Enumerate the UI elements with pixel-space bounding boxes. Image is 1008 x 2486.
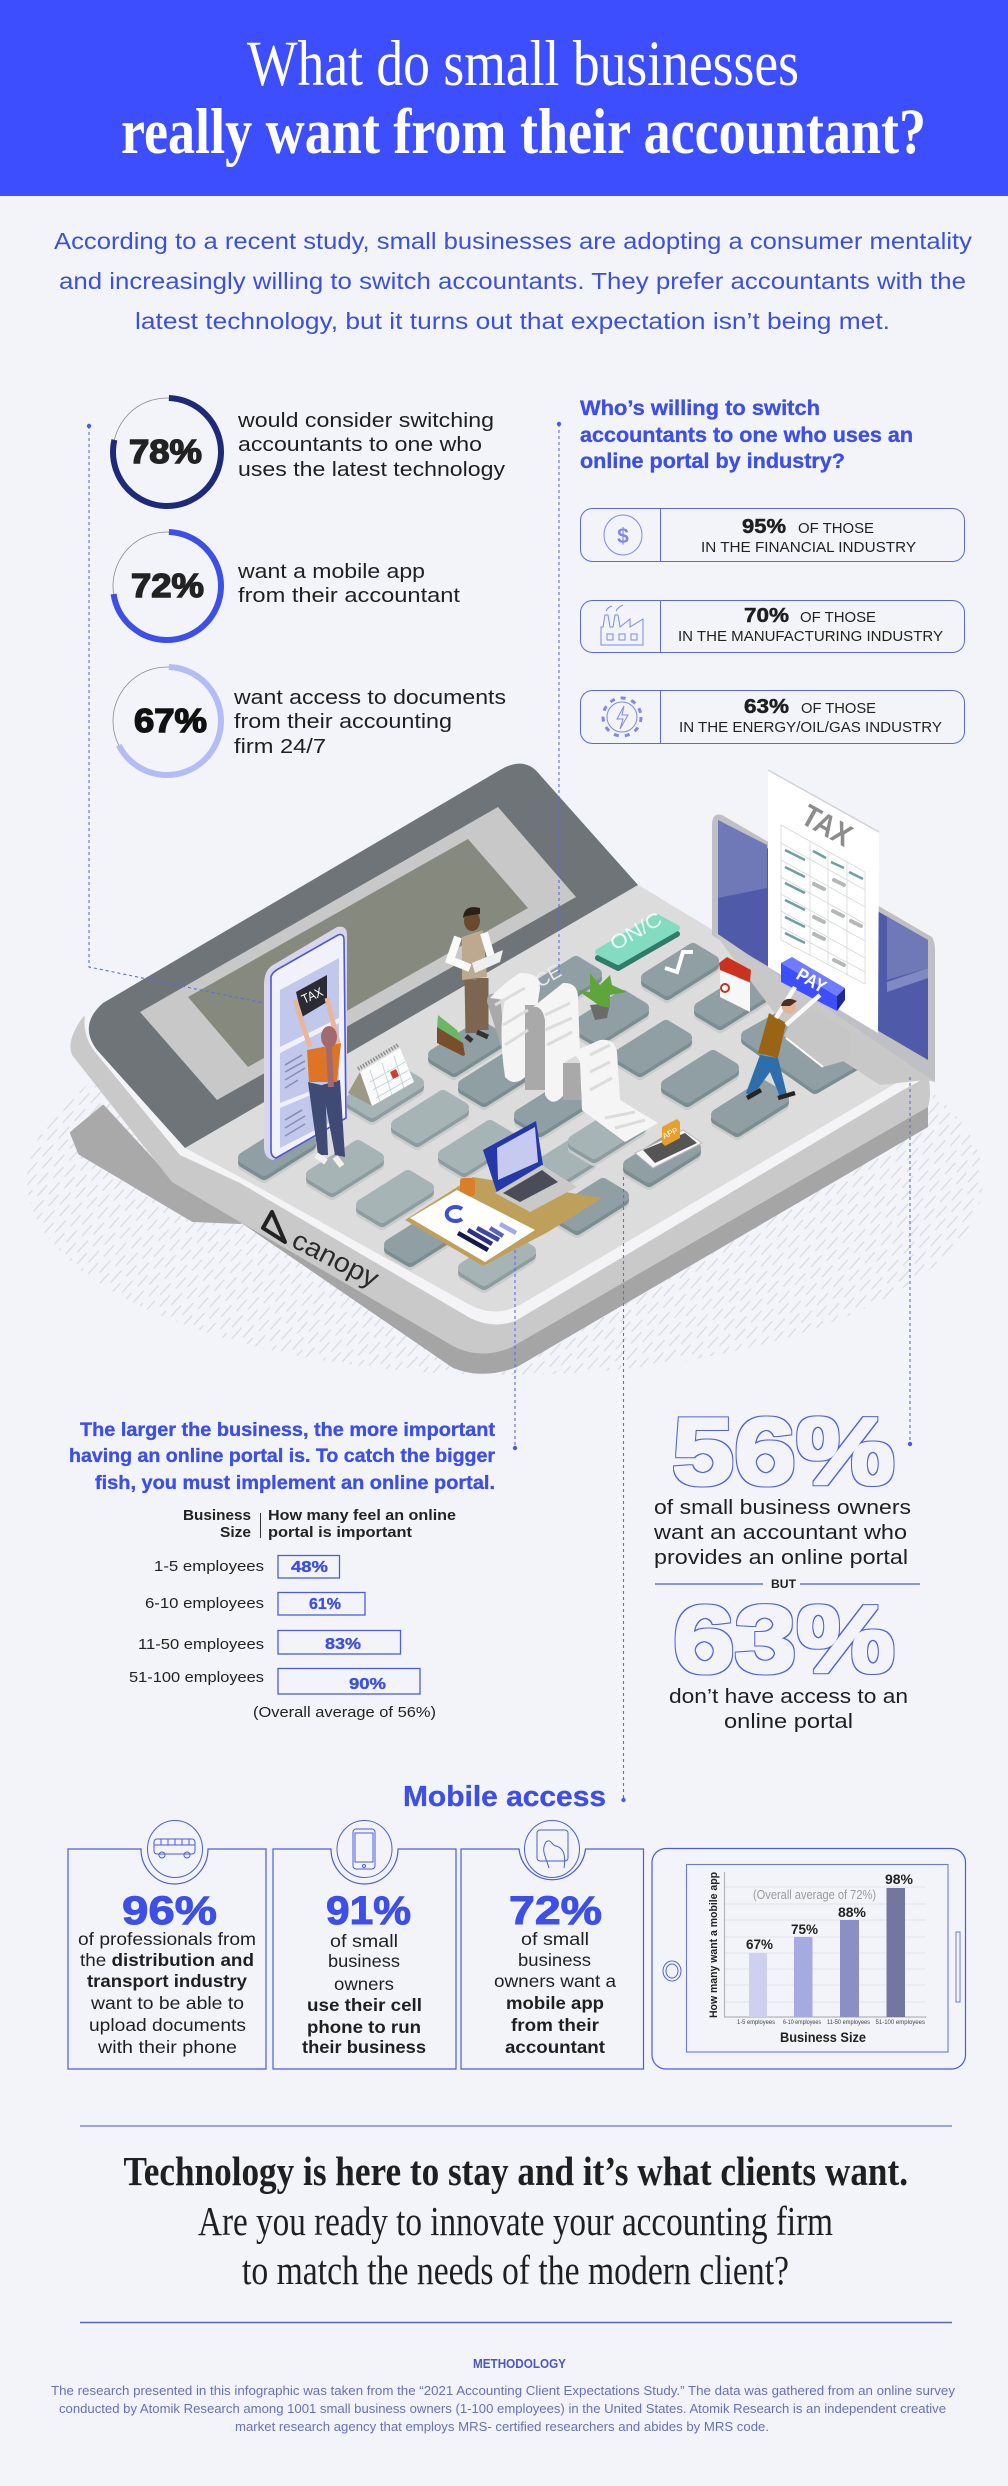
industry heading	[580, 397, 913, 473]
mobile app bar chart: Business Size	[780, 2029, 866, 2045]
chart column headers	[183, 1507, 456, 1541]
industry box: manufacturing	[580, 600, 964, 652]
stat: 72%	[111, 530, 460, 642]
mobile app bar chart: 88%	[838, 1904, 867, 1920]
large phone: TAX	[299, 984, 326, 1007]
card: transport: upload documents	[89, 2015, 246, 2035]
small desk calendar	[348, 1045, 414, 1106]
methodology: market research agency that employs MRS- certified researchers and abides by MRS code.	[235, 2420, 769, 2434]
smartphone with app tag	[635, 1119, 702, 1168]
card: cell phone: business	[328, 1951, 400, 1971]
dotted connector lines	[89, 424, 910, 1800]
large phone	[264, 927, 347, 1160]
card: cell phone: phone to run	[307, 2017, 421, 2037]
card: mobile app: mobile app	[506, 1993, 604, 2013]
mobile app bar chart: 1-5 employees	[737, 2019, 776, 2026]
business size bar chart: 11-50 employees	[138, 1636, 264, 1653]
icon: dollar: $	[617, 525, 629, 548]
methodology: The research presented in this infographic was taken from the “2021 Accounting Client Expectations Study.” The data was gathered from an online survey	[51, 2384, 956, 2398]
card: cell phone: of small	[330, 1931, 398, 1951]
but divider: BUT	[771, 1579, 796, 1591]
industry box: financial: 95%	[742, 516, 786, 538]
hatched ground shadow	[27, 985, 983, 1375]
card: transport: of professionals from	[78, 1929, 256, 1949]
industry box: energy	[580, 690, 964, 744]
stat: 67%: 67%	[134, 702, 207, 739]
chart column headers: How many feel an online	[268, 1507, 456, 1524]
keypad keys: CE	[532, 961, 565, 992]
mobile app bar chart	[708, 1871, 926, 2045]
industry box: manufacturing: 70%	[744, 605, 789, 627]
stat: 67%: firm 24/7	[234, 735, 326, 758]
industry box: financial: OF THOSE	[798, 520, 874, 537]
mobile app bar chart: 67%	[746, 1936, 774, 1952]
card: mobile app: owners want a	[494, 1971, 616, 1991]
pay button	[781, 957, 845, 1011]
red calendar	[719, 957, 751, 1012]
online portal stat: 63%: online portal	[724, 1710, 853, 1733]
tablet home button	[663, 1961, 681, 1981]
icon: gear	[603, 698, 641, 736]
header banner	[0, 0, 1008, 196]
coffee cup	[460, 1178, 475, 1196]
smartphone with app tag: APP	[661, 1126, 679, 1141]
icon: phone	[337, 1820, 392, 1878]
closing statement	[124, 2148, 908, 2293]
online portal stat: 63%	[669, 1587, 908, 1733]
card: cell phone	[273, 1820, 456, 2069]
stat: 78%: uses the latest technology	[238, 458, 506, 481]
business size heading: fish, you must implement an online portal.	[95, 1472, 495, 1494]
business size bar chart: 48%	[291, 1559, 328, 1576]
closing statement: Are you ready to innovate your accounting firm	[198, 2198, 833, 2244]
online portal stat: 56%: 56%	[672, 1399, 895, 1505]
icon: touch screen	[524, 1820, 580, 1878]
closing statement: to match the needs of the modern client?	[242, 2247, 789, 2293]
card: mobile app: business	[518, 1950, 591, 1970]
industry box: manufacturing: OF THOSE	[800, 609, 876, 626]
business size bar chart	[129, 1507, 456, 1721]
chart column headers: Size	[220, 1524, 251, 1541]
plant	[577, 973, 627, 1020]
business size bar chart: 61%	[309, 1596, 341, 1613]
card: transport: the distribution and	[80, 1950, 254, 1970]
online portal stat: 63%: 63%	[673, 1587, 895, 1693]
chart column headers: portal is important	[268, 1524, 412, 1541]
mobile access heading: Mobile access	[403, 1781, 606, 1813]
tax document: TAX	[796, 798, 858, 853]
industry box: manufacturing: IN THE MANUFACTURING INDUSTRY	[678, 628, 943, 645]
stat: 78%: would consider switching	[237, 409, 494, 432]
online portal stat: 56%: provides an online portal	[654, 1546, 908, 1569]
industry box: energy: OF THOSE	[801, 700, 876, 717]
card: transport	[68, 1820, 266, 2069]
card: cell phone: owners	[334, 1974, 394, 1994]
intro paragraph	[54, 228, 973, 334]
mobile app bar chart: 75%	[791, 1921, 819, 1937]
business size heading: having an online portal is. To catch the bigger	[69, 1445, 495, 1467]
tax document	[768, 770, 879, 1033]
card: transport: 96%	[122, 1889, 217, 1933]
mobile app bar chart: How many want a mobile app	[708, 1872, 720, 2018]
online portal stat: 56%: want an accountant who	[653, 1521, 907, 1544]
mobile app bar chart: 98%	[885, 1871, 914, 1887]
card: cell phone: use their cell	[307, 1995, 422, 2015]
business size bar chart: 83%	[325, 1636, 361, 1653]
person pressing pay	[746, 987, 820, 1098]
ON/C key: ON/C	[606, 908, 666, 955]
industry box: financial: IN THE FINANCIAL INDUSTRY	[701, 539, 916, 556]
card: mobile app: 72%	[509, 1889, 602, 1933]
industry box: financial	[580, 508, 964, 562]
methodology: conducted by Atomik Research among 1001 small business owners (1-100 employees) in the United States. Atomik Research is an independent creative	[59, 2402, 946, 2416]
gold folder and laptop	[405, 1121, 602, 1266]
canopy logo	[263, 1212, 384, 1294]
calculator illustration	[70, 764, 942, 1374]
industry box: energy: 63%	[744, 696, 789, 718]
stat: 72%: 72%	[131, 567, 204, 604]
stat: 72%: want a mobile app	[237, 560, 425, 583]
icon: factory	[601, 605, 643, 645]
business size heading	[69, 1419, 496, 1494]
online portal stat: 56%: of small business owners	[654, 1496, 911, 1519]
mobile app bar chart: (Overall average of 72%)	[753, 1888, 876, 1902]
online portal stat: 63%: don’t have access to an	[669, 1685, 908, 1708]
card: cell phone: their business	[302, 2037, 426, 2057]
industry heading: Who’s willing to switch	[580, 397, 820, 420]
keypad keys	[244, 949, 870, 1287]
business size bar chart: 51-100 employees	[129, 1669, 264, 1686]
report document	[410, 1190, 535, 1262]
wallet	[437, 1015, 465, 1056]
stat: 78%: accountants to one who	[238, 433, 482, 456]
tablet chart card	[652, 1848, 966, 2069]
display panel	[89, 764, 638, 1148]
stat: 78%: 78%	[129, 433, 202, 470]
stat: 67%: from their accounting	[234, 710, 452, 733]
industry box: energy: IN THE ENERGY/OIL/GAS INDUSTRY	[679, 719, 942, 736]
methodology: METHODOLOGY	[473, 2357, 567, 2371]
online portal stat: 56%	[653, 1399, 911, 1569]
paper receipt	[487, 973, 658, 1142]
card: cell phone: 91%	[326, 1889, 411, 1933]
title	[121, 28, 926, 168]
calculator body	[70, 885, 930, 1374]
card: transport: want to be able to	[90, 1993, 244, 2013]
stat: 78%	[111, 396, 506, 508]
stat: 72%: from their accountant	[238, 584, 460, 607]
intro paragraph: According to a recent study, small businesses are adopting a consumer mentality	[54, 228, 973, 254]
ON/C key	[598, 908, 677, 968]
icon: dollar	[604, 515, 642, 555]
card: mobile app	[461, 1820, 644, 2069]
card: mobile app: of small	[521, 1929, 589, 1949]
intro paragraph: latest technology, but it turns out that expectation isn’t being met.	[135, 308, 890, 334]
industry heading: online portal by industry?	[580, 450, 845, 473]
industry heading: accountants to one who uses an	[580, 424, 913, 447]
back screen with tax document	[712, 770, 942, 1085]
mobile app bar chart: 11-50 employees	[827, 2019, 871, 2026]
chart column headers: Business	[183, 1507, 251, 1524]
pay button: PAY	[793, 964, 830, 997]
card: mobile app: accountant	[505, 2037, 605, 2057]
title: What do small businesses	[247, 28, 799, 100]
business size heading: The larger the business, the more important	[80, 1419, 496, 1441]
mobile app bar chart: 51-100 employees	[876, 2019, 926, 2026]
business size bar chart: 90%	[349, 1676, 386, 1693]
icon: bus	[148, 1820, 202, 1878]
card: mobile app: from their	[511, 2015, 599, 2035]
stat: 67%: want access to documents	[233, 686, 506, 709]
canopy logo: canopy	[287, 1225, 384, 1294]
man with tablet	[450, 907, 503, 1041]
laptop	[483, 1121, 577, 1212]
business size bar chart: 1-5 employees	[154, 1558, 264, 1575]
connector dots	[87, 422, 912, 1802]
card: transport: with their phone	[97, 2037, 237, 2057]
stat: 67%	[111, 665, 506, 777]
methodology	[51, 2357, 956, 2434]
card: transport: transport industry	[87, 1971, 247, 1991]
woman at phone	[264, 927, 347, 1166]
paper tray	[784, 1000, 851, 1067]
intro paragraph: and increasingly willing to switch accountants. They prefer accountants with the	[59, 268, 966, 294]
mobile app bar chart: 6-10 employees	[783, 2019, 822, 2026]
business size bar chart: 6-10 employees	[145, 1595, 264, 1612]
business size bar chart: (Overall average of 56%)	[253, 1704, 436, 1721]
